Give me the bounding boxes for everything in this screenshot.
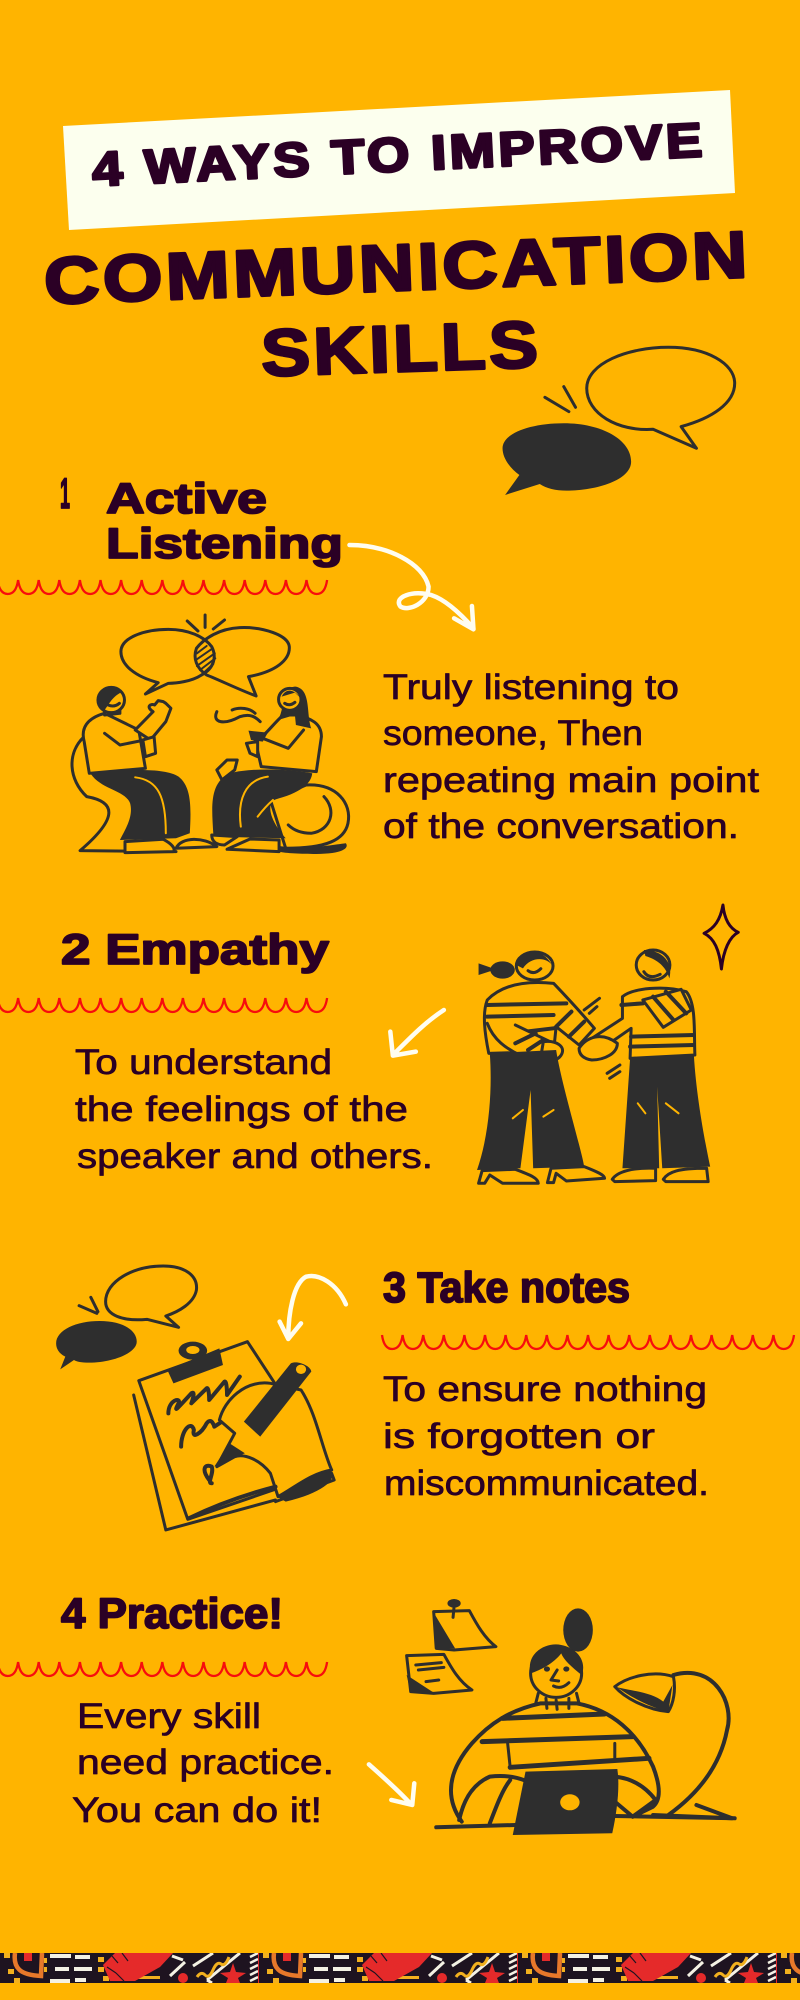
hand [217,1383,332,1497]
arrow: white down-right [369,1764,414,1805]
body text 2: the feelings of the [75,1090,408,1129]
body text 2: speaker and others. [77,1137,433,1176]
body text 2: To understand [75,1043,332,1082]
section 4: practice [0,1590,735,1835]
body text 1: repeating main point [383,761,759,800]
body text 2 [75,1043,433,1176]
illustration: speech bubbles small [56,1266,197,1369]
decorative pattern band [0,1953,800,1983]
pencil [244,1362,311,1437]
section 2: empathy [0,905,738,1183]
wavy underline [382,1335,794,1349]
section 1: active listening [0,470,759,854]
illustration: two people shaking hands [477,905,738,1183]
title block [43,90,752,390]
body text 3: miscommunicated. [384,1464,709,1503]
man in striped sweater [579,950,710,1182]
arrow: white curved [280,1276,346,1339]
icon: speech bubbles [503,347,735,495]
body text 1: someone, Then [383,714,643,753]
heading: active listening [106,475,343,568]
illustration: two people talking [72,615,349,854]
body text 3: To ensure nothing [383,1370,707,1409]
body text 1: of the conversation. [383,807,739,846]
section 3: take notes [56,1264,794,1530]
section 1: active listening: 1 [60,470,70,518]
heading: 3 take notes: 3 Take notes [383,1264,630,1312]
arrow: curly white [349,545,473,629]
body text 4 [72,1697,334,1830]
heading: active listening: Active [106,475,267,523]
illustration: clipboard and hand writing [134,1342,334,1530]
wavy underline [0,580,327,594]
scribbled notes [168,1377,240,1483]
body text 1: Truly listening to [383,668,679,707]
lamp [615,1673,732,1818]
heading: active listening: Listening [106,520,343,568]
title banner [63,90,735,230]
title line: 4 ways to improve: 4 WAYS TO IMPROVE [91,114,707,197]
wavy underline [0,998,327,1012]
woman with ponytail [477,952,605,1183]
laptop [513,1769,618,1835]
heading: 2 empathy: 2 Empathy [61,926,329,974]
seated man [72,687,217,853]
illustration: person at laptop with notes and lamp [407,1599,735,1835]
body text 4: need practice. [77,1743,334,1782]
sparkle [704,905,738,969]
body text 4: You can do it! [72,1791,322,1830]
body text 4: Every skill [77,1697,261,1736]
arrow: white down-left [390,1010,444,1056]
title line: skills: SKILLS [260,307,542,390]
person [436,1608,735,1835]
overlapping speech bubbles [121,615,289,696]
body text 3 [383,1370,709,1503]
seated woman [212,687,349,854]
pinned notes [407,1599,496,1693]
body text 1 [383,668,759,846]
title line: communication: COMMUNICATION [43,217,752,318]
body text 3: is forgotten or [383,1417,655,1456]
heading: 4 practice: 4 Practice! [61,1590,283,1638]
wavy underline [0,1662,327,1676]
